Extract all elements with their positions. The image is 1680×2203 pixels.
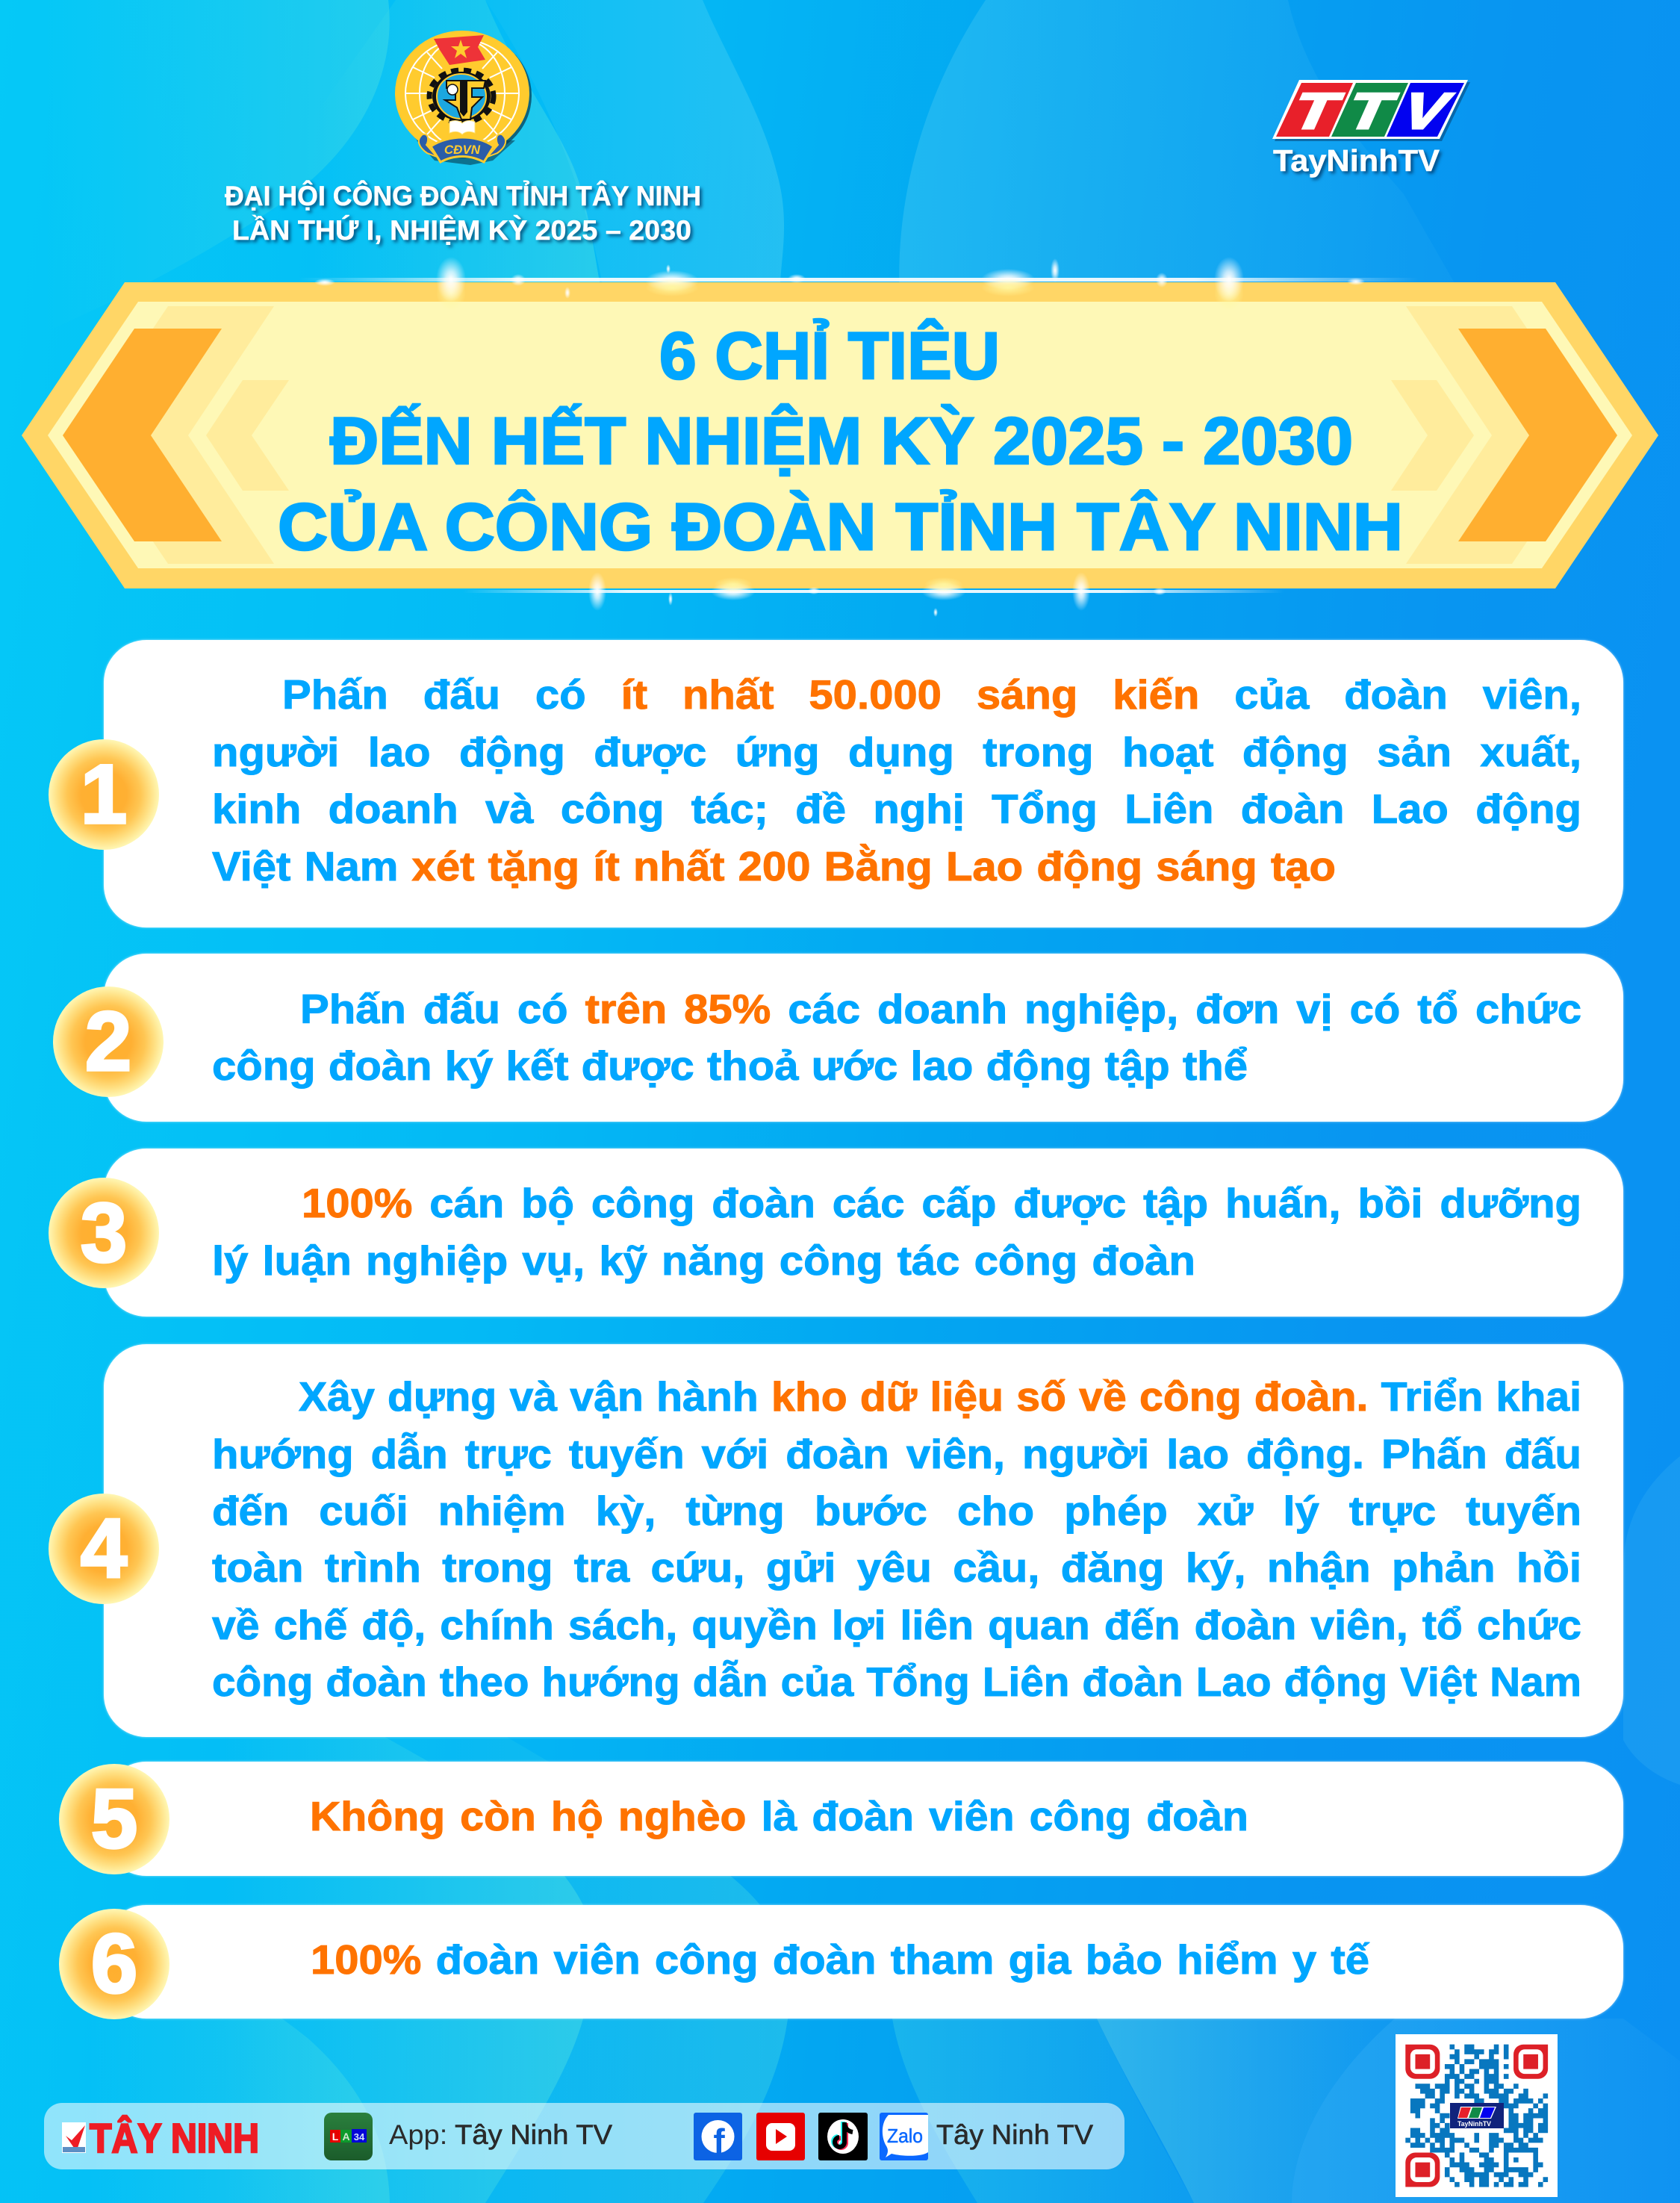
sparkles top	[299, 257, 1419, 311]
text line: Việt Nam xét tặng ít nhất 200 Bằng Lao động sáng tạo	[212, 843, 1336, 889]
number badge 6: 6	[91, 1917, 137, 2010]
QR centre logo: TayNinhTV	[1457, 2120, 1491, 2128]
panel: target 4	[104, 1344, 1623, 1737]
banner frame	[22, 282, 1658, 588]
text line: hướng dẫn trực tuyến với đoàn viên, người lao động. Phấn đấu	[212, 1431, 1581, 1477]
text line: Phấn đấu có trên 85% các doanh nghiệp, đơn vị có tổ chức	[300, 986, 1581, 1032]
text line: Phấn đấu có ít nhất 50.000 sáng kiến của đoàn viên,	[282, 671, 1581, 718]
number badge 3	[49, 1178, 159, 1288]
text line: 100% cán bộ công đoàn các cấp được tập huấn, bồi dưỡng	[302, 1180, 1581, 1226]
number badge 2	[53, 986, 164, 1097]
number badge 1	[49, 739, 159, 850]
QR modules	[1405, 2047, 1548, 2184]
title text: 6 CHỈ TIÊU	[659, 318, 1000, 393]
finder bottom-left	[1405, 2152, 1440, 2187]
panel: target 2	[104, 954, 1623, 1122]
footer bar	[44, 2103, 1124, 2169]
icon: app	[324, 2113, 373, 2160]
header text: congress name: ĐẠI HỘI CÔNG ĐOÀN TỈNH TÂY NINH	[225, 180, 701, 211]
icon: zalo: Zalo	[887, 2125, 923, 2147]
icon: app: L	[332, 2131, 339, 2143]
number badge 4: 4	[81, 1502, 127, 1595]
text line: Không còn hộ nghèo là đoàn viên công đoàn	[310, 1793, 1248, 1839]
number badge 4	[49, 1494, 159, 1604]
sparkles bottom	[463, 572, 1284, 617]
number badge 5: 5	[91, 1772, 137, 1865]
logo: TTV TayNinhTV: T	[1337, 82, 1404, 140]
text line: công đoàn theo hướng dẫn của Tổng Liên đoàn Lao động Việt Nam	[212, 1659, 1581, 1705]
panel: target 3	[104, 1149, 1623, 1317]
text line: toàn trình trong tra cứu, gửi yêu cầu, đăng ký, nhận phản hồi	[212, 1544, 1581, 1591]
right chevrons	[1391, 306, 1617, 564]
finder top-right	[1513, 2045, 1548, 2079]
text line: Xây dựng và vận hành kho dữ liệu số về công đoàn. Triển khai	[299, 1373, 1581, 1420]
number badge 5	[59, 1764, 169, 1874]
logo: TTV TayNinhTV	[1272, 80, 1470, 182]
number badge 6	[59, 1909, 169, 2019]
icon: facebook	[694, 2113, 742, 2160]
panel: target 5	[104, 1762, 1623, 1876]
icon: zalo	[880, 2113, 928, 2160]
title text: CỦA CÔNG ĐOÀN TỈNH TÂY NINH	[278, 489, 1403, 564]
social label: Tây Ninh TV	[936, 2119, 1093, 2150]
icon: facebook: f	[713, 2122, 725, 2160]
number badge 3: 3	[81, 1186, 127, 1279]
logo: Tây Ninh newspaper: TÂY NINH	[90, 2115, 259, 2161]
app label: App: Tây Ninh TV	[389, 2119, 612, 2150]
title banner	[22, 258, 1658, 617]
text line: lý luận nghiệp vụ, kỹ năng công tác công đoàn	[212, 1237, 1195, 1284]
gear	[429, 70, 494, 122]
text line: người lao động được ứng dụng trong hoạt động sản xuất,	[212, 729, 1581, 775]
header text: congress name	[224, 180, 704, 249]
text line: đến cuối nhiệm kỳ, từng bước cho phép xử lý trực tuyến	[212, 1488, 1581, 1534]
QR code	[1396, 2034, 1558, 2197]
icon: trade union emblem	[395, 31, 532, 165]
text line: kinh doanh và công tác; đề nghị Tổng Liên đoàn Lao động	[212, 786, 1581, 832]
banner inner panel	[48, 302, 1632, 568]
header text: congress name: LẦN THỨ I, NHIỆM KỲ 2025 – 2030	[232, 214, 691, 246]
left chevrons	[63, 306, 289, 564]
finder top-left	[1405, 2045, 1440, 2079]
number badge 2: 2	[85, 995, 131, 1088]
logo: TTV TayNinhTV: V	[1392, 83, 1460, 139]
number badge 1: 1	[81, 748, 127, 841]
panel: target 6	[104, 1905, 1623, 2019]
text line: công đoàn ký kết được thoả ước lao động tập thể	[212, 1043, 1248, 1089]
text line: về chế độ, chính sách, quyền lợi liên quan đến đoàn viên, tổ chức	[212, 1602, 1581, 1648]
icon: youtube	[756, 2113, 805, 2160]
logo: TTV TayNinhTV: TayNinhTV	[1273, 143, 1440, 178]
icon: app: A	[342, 2131, 350, 2143]
text line: 100% đoàn viên công đoàn tham gia bảo hiểm y tế	[311, 1936, 1369, 1983]
icon: app: 34	[354, 2131, 365, 2143]
panel: target 1	[104, 640, 1623, 928]
QR centre logo	[1450, 2103, 1504, 2128]
icon: tiktok	[818, 2113, 868, 2160]
title text	[278, 318, 1403, 564]
icon: trade union emblem: CĐVN	[444, 143, 481, 157]
title text: ĐẾN HẾT NHIỆM KỲ 2025 - 2030	[330, 403, 1353, 478]
logo: TTV TayNinhTV: T	[1282, 82, 1350, 140]
